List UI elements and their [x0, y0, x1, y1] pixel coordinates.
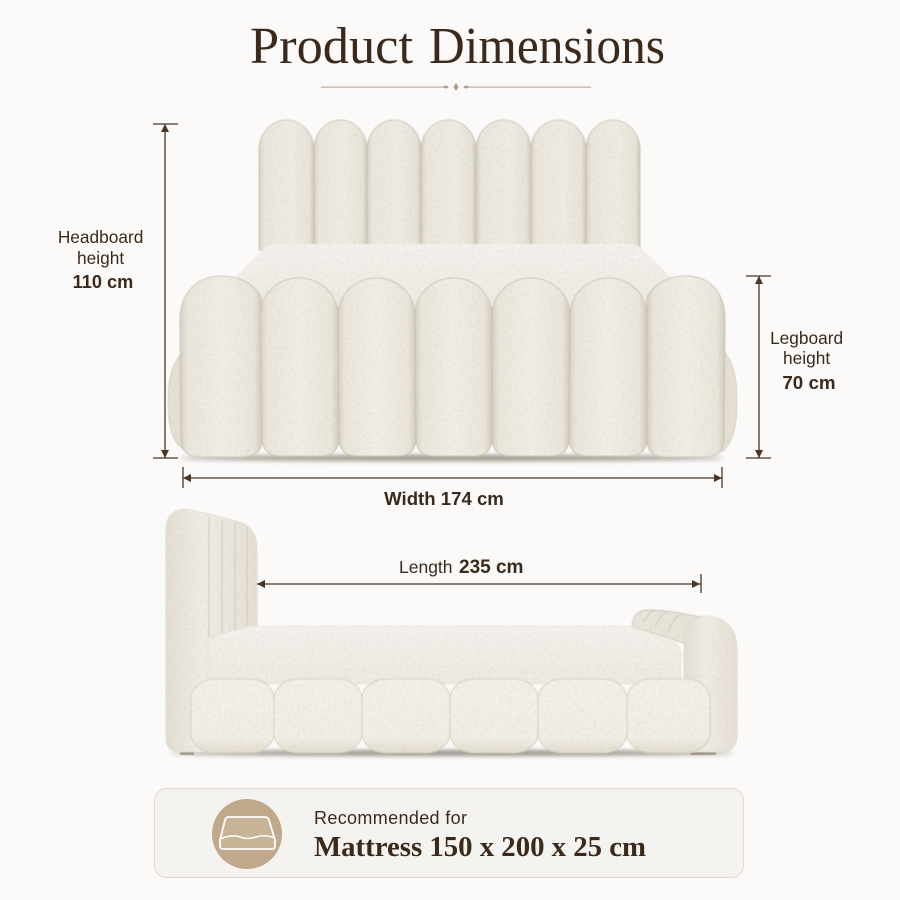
dimension arrow: length	[257, 574, 701, 593]
label: length: Length	[399, 557, 453, 577]
label: legboard height: 70 cm	[782, 372, 836, 393]
dimension arrow: width	[183, 467, 722, 488]
label: headboard height: Headboard	[58, 227, 143, 247]
ground shadow: front view	[180, 455, 724, 461]
panel background	[154, 788, 744, 878]
dimension arrow: headboard height	[153, 124, 178, 458]
dimension arrow: legboard height	[746, 276, 771, 458]
label: headboard height: 110 cm	[73, 272, 133, 292]
label: legboard height: Legboard	[770, 328, 843, 348]
label: headboard height: height	[77, 248, 124, 268]
label: length: 235 cm	[459, 557, 523, 578]
footboard front panels	[180, 276, 725, 457]
panel: mattress recommendation	[154, 788, 744, 878]
footboard side	[684, 616, 737, 752]
right side bump	[721, 350, 737, 452]
front view bed illustration	[168, 120, 737, 461]
label: legboard height: height	[783, 348, 830, 368]
icon: mattress	[212, 799, 282, 869]
text: mattress size: Mattress 150 x 200 x 25 cm	[314, 831, 646, 863]
text: recommended for: Recommended for	[314, 808, 467, 828]
title: Dimensions	[429, 18, 665, 75]
headboard ribs	[209, 517, 247, 638]
label: width: Width 174 cm	[384, 488, 504, 509]
base cushions	[191, 679, 710, 753]
ground shadow: side view	[170, 750, 734, 756]
mattress side view	[208, 626, 681, 684]
mattress front view	[230, 244, 676, 320]
left side bump	[168, 350, 186, 450]
title divider ornament	[321, 83, 591, 91]
title: Product	[250, 18, 414, 75]
headboard side	[166, 509, 257, 752]
headboard front panels	[259, 120, 640, 250]
side view bed illustration	[166, 509, 737, 756]
footboard ribs	[632, 610, 705, 650]
bed feet	[180, 752, 716, 755]
